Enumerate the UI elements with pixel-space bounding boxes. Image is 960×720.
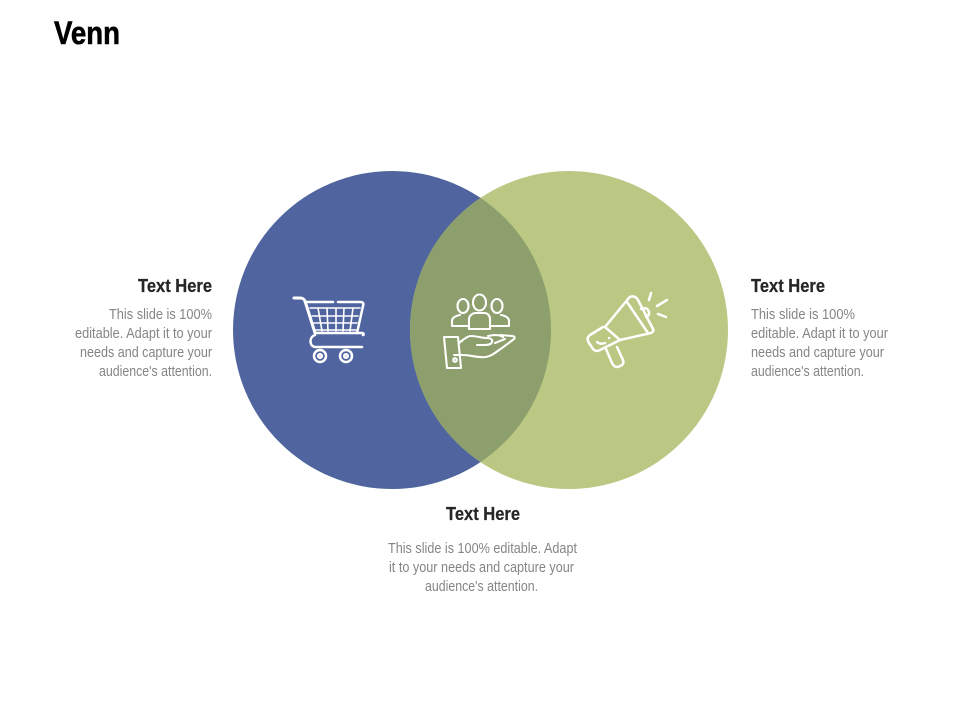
- icon: megaphone: [588, 293, 667, 367]
- venn diagram: [233, 171, 728, 489]
- body: bottom: This slide is 100% editable. Adapt: [388, 541, 577, 557]
- body: right: This slide is 100%: [751, 307, 855, 323]
- body: bottom: it to your needs and capture your: [389, 560, 574, 576]
- overlap region: [410, 198, 551, 462]
- body: right: editable. Adapt it to your: [751, 326, 888, 342]
- body: left: [75, 307, 212, 380]
- body: left: This slide is 100%: [109, 307, 212, 323]
- heading: right: Text Here: [751, 276, 825, 296]
- body: left: editable. Adapt it to your: [75, 326, 212, 342]
- body: left: audience's attention.: [99, 364, 212, 380]
- body: right: needs and capture your: [751, 345, 884, 361]
- text block: left: [75, 276, 212, 380]
- heading: left: Text Here: [138, 276, 212, 296]
- body: right: audience's attention.: [751, 364, 864, 380]
- circle: blue: [233, 171, 551, 489]
- body: left: needs and capture your: [80, 345, 212, 361]
- text block: right: [751, 276, 888, 380]
- body: right: [751, 307, 888, 380]
- title: Venn: [54, 15, 120, 51]
- circle: green: [410, 171, 728, 489]
- icon: shopping cart: [294, 298, 364, 362]
- body: bottom: [388, 541, 577, 595]
- body: bottom: audience's attention.: [425, 579, 538, 595]
- icon: people on hand: [444, 294, 515, 368]
- heading: bottom: Text Here: [446, 504, 520, 524]
- text block: bottom: [388, 504, 577, 595]
